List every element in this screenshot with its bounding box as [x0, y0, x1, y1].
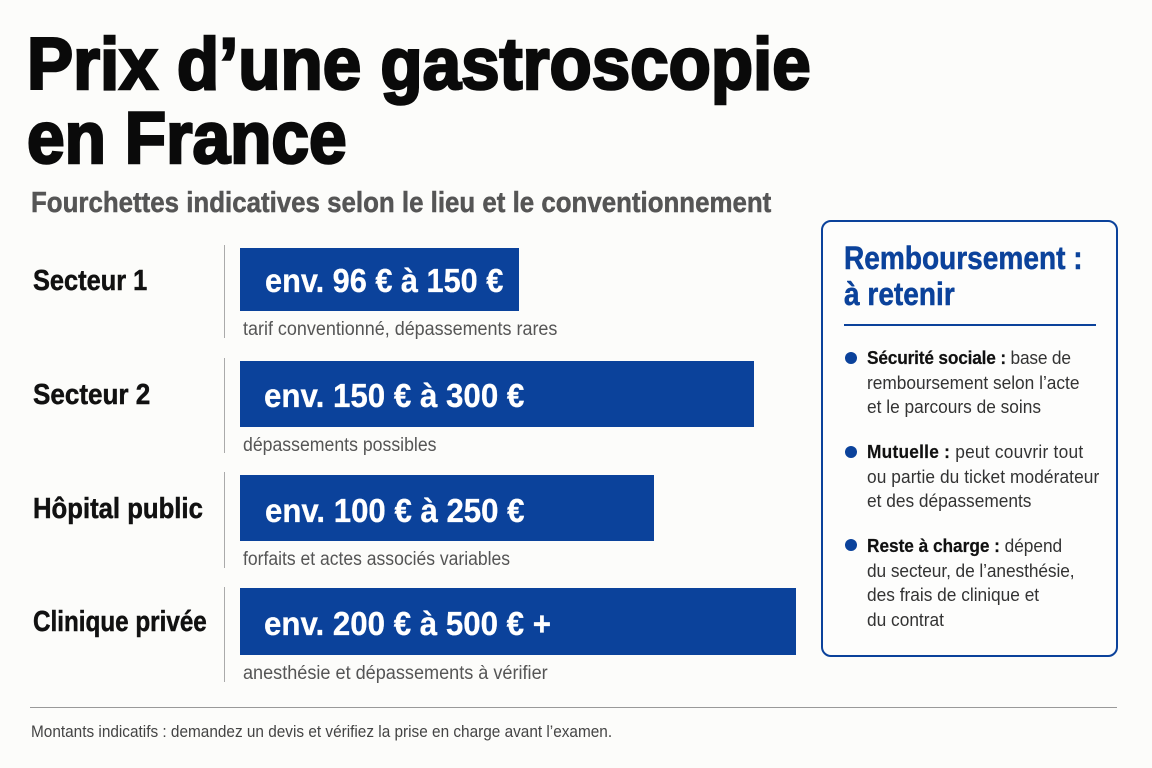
value: Secteur 2: env. 150 € à 300 € [264, 377, 524, 414]
label: Secteur 2: Secteur 2 [33, 379, 150, 411]
row: Clinique privée [33, 587, 796, 684]
value: Secteur 1: env. 96 € à 150 € [265, 262, 503, 299]
text: Mutuelle: et des dépassements [867, 490, 1031, 511]
title: en France [27, 98, 347, 179]
bullet icon: Mutuelle [845, 446, 857, 458]
text: Mutuelle: Mutuelle : peut couvrir tout [867, 441, 1083, 462]
label: Secteur 1: Secteur 1 [33, 265, 147, 297]
text: Reste à charge: du secteur, de l’anesthésie, [867, 560, 1075, 580]
value: Hôpital public: env. 100 € à 250 € [265, 492, 525, 529]
text: Mutuelle [867, 441, 1099, 511]
label: Clinique privée: Clinique privée [33, 606, 207, 638]
text: Mutuelle: ou partie du ticket modérateur [867, 466, 1099, 486]
row: Secteur 1 [33, 245, 557, 340]
value: Clinique privée: env. 200 € à 500 € + [264, 605, 551, 642]
note: Secteur 2: dépassements possibles [243, 435, 437, 456]
label: Hôpital public: Hôpital public [33, 493, 203, 525]
bar: Secteur 2 [240, 361, 754, 427]
text: Sécurité sociale: et le parcours de soins [867, 396, 1041, 417]
bar: Secteur 1 [240, 248, 519, 311]
bar: Hôpital public [240, 475, 654, 541]
bar: Clinique privée [240, 588, 796, 655]
note: Clinique privée: anesthésie et dépassements à vérifier [243, 663, 548, 684]
text: Sécurité sociale: remboursement selon l’acte [867, 372, 1079, 392]
panel heading [844, 240, 1083, 312]
text: Sécurité sociale: Sécurité sociale : base de [867, 347, 1071, 368]
note: Hôpital public: forfaits et actes associés variables [243, 549, 510, 570]
row: Hôpital public [33, 472, 654, 570]
panel heading: à retenir [844, 276, 955, 312]
text: Reste à charge: Reste à charge : dépend [867, 535, 1062, 556]
panel: remboursement [821, 220, 1118, 657]
title [27, 24, 811, 179]
footnote: Montants indicatifs : demandez un devis et vérifiez la prise en charge avant l’examen. [31, 722, 612, 741]
title: Prix d’une gastroscopie [27, 24, 811, 105]
footer rule [30, 707, 1117, 708]
row: Secteur 2 [33, 358, 754, 456]
panel heading: Remboursement : [844, 240, 1083, 276]
bullet icon: Reste à charge [845, 539, 857, 551]
bullet icon: Sécurité sociale [845, 352, 857, 364]
text: Reste à charge: des frais de clinique et [867, 584, 1039, 605]
panel heading rule [844, 324, 1096, 326]
text: Reste à charge: du contrat [867, 608, 944, 630]
subtitle: Fourchettes indicatives selon le lieu et le conventionnement [31, 187, 771, 219]
text: Reste à charge [867, 535, 1075, 630]
note: Secteur 1: tarif conventionné, dépassements rares [243, 319, 557, 340]
text: Sécurité sociale [867, 347, 1079, 417]
